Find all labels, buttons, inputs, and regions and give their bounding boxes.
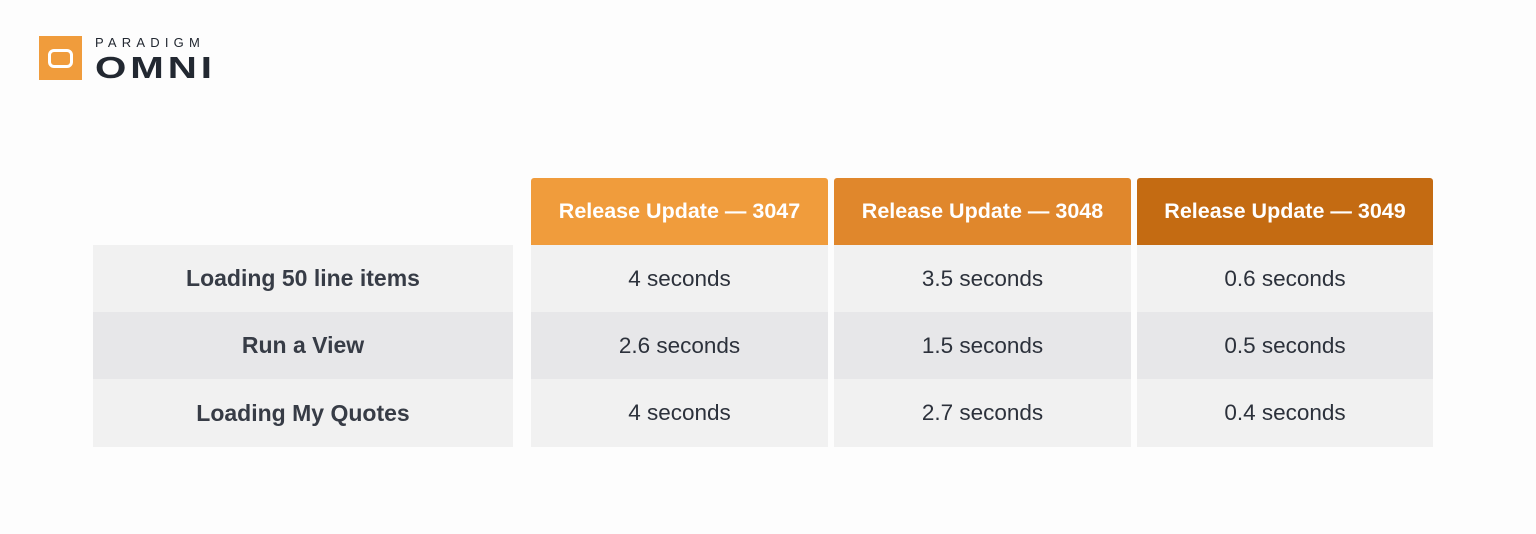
cell: [531, 245, 828, 312]
header: 3048: Release Update — 3048: [862, 199, 1103, 223]
cell: [531, 379, 828, 447]
cell: [834, 312, 1131, 379]
logo text: OMNI: OMNI: [95, 50, 216, 85]
header: 3049: Release Update — 3049: [1164, 199, 1406, 223]
cell: [531, 312, 828, 379]
table: [93, 178, 1433, 447]
header: 3049: [1137, 178, 1433, 245]
cell: 0.5 seconds: [1224, 332, 1346, 358]
header: 3048: [834, 178, 1131, 245]
row label: Run a View: [93, 312, 513, 379]
cell: 4 seconds: [628, 400, 731, 425]
cell: [1137, 379, 1433, 447]
cell: 2.6 seconds: [619, 332, 740, 358]
row label: Loading 50 line items: Loading 50 line items: [186, 265, 420, 291]
cell: [834, 245, 1131, 312]
cell: 2.7 seconds: [922, 400, 1043, 425]
logo text: PARADIGM: PARADIGM: [95, 35, 205, 50]
header: 3047: Release Update — 3047: [559, 199, 800, 223]
cell: 1.5 seconds: [922, 332, 1043, 358]
cell: 3.5 seconds: [922, 266, 1043, 290]
header: 3047: [531, 178, 828, 245]
cell: 0.4 seconds: [1224, 400, 1346, 425]
row label: Loading My Quotes: [93, 379, 513, 447]
cell: 0.6 seconds: [1224, 266, 1346, 290]
cell: [834, 379, 1131, 447]
logo: [39, 35, 216, 85]
row label: Loading My Quotes: Loading My Quotes: [196, 400, 410, 426]
cell: [1137, 312, 1433, 379]
cell: [1137, 245, 1433, 312]
row label: Loading 50 line items: [93, 245, 513, 312]
icon: logo square: [39, 36, 82, 80]
row label: Run a View: Run a View: [242, 332, 364, 358]
cell: 4 seconds: [628, 266, 731, 290]
